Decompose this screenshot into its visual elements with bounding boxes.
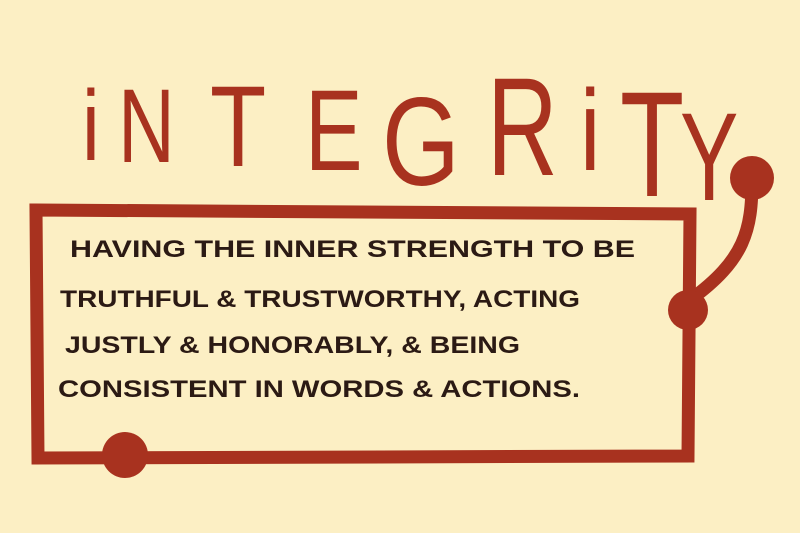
definition text: TRUTHFUL & TRUSTWORTHY, ACTING xyxy=(60,286,580,313)
dot: top right xyxy=(730,156,774,200)
definition text xyxy=(58,236,635,403)
title: Y xyxy=(680,86,738,227)
title: i xyxy=(82,71,100,182)
definition text: HAVING THE INNER STRENGTH TO BE xyxy=(70,236,635,263)
connector line xyxy=(690,180,752,300)
definition text: JUSTLY & HONORABLY, & BEING xyxy=(65,332,520,359)
title: T xyxy=(210,63,266,191)
dot: bottom left xyxy=(102,432,148,478)
definition box xyxy=(36,180,752,458)
definition text: CONSISTENT IN WORDS & ACTIONS. xyxy=(58,376,580,403)
title: i xyxy=(580,67,600,195)
title: N xyxy=(118,67,175,185)
title: T xyxy=(620,62,684,228)
title: E xyxy=(305,66,363,195)
title: R xyxy=(487,49,558,205)
dot: right middle xyxy=(668,290,708,330)
title xyxy=(82,49,738,228)
title: G xyxy=(382,72,460,212)
